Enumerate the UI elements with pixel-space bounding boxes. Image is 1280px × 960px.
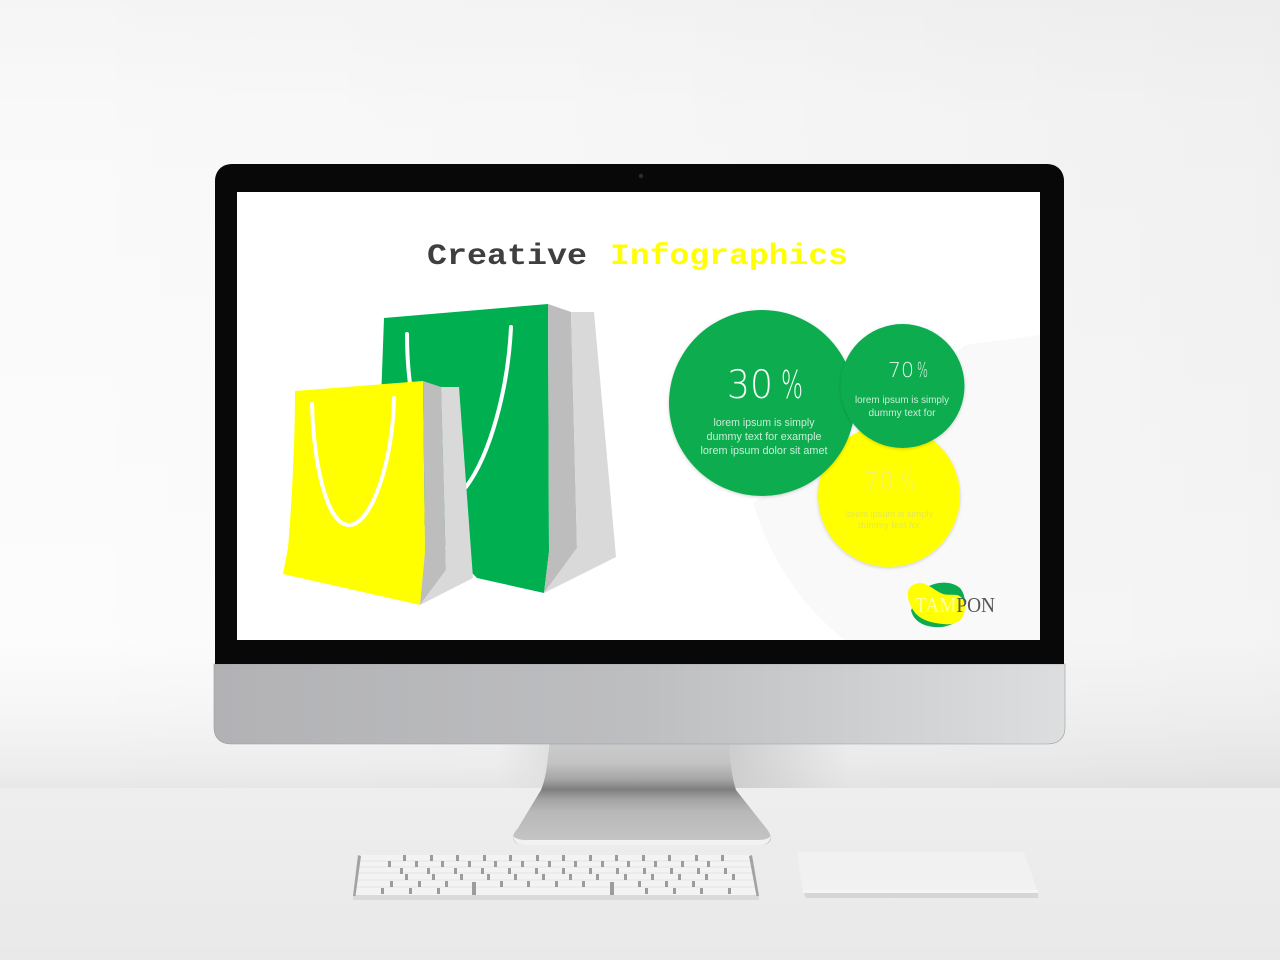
background: desk — [0, 788, 1280, 960]
monitor chin — [214, 664, 1065, 744]
circle: green 70%: 70 — [888, 358, 914, 382]
circle: yellow 70%: lorem ipsum is simply — [845, 509, 933, 520]
screen — [237, 192, 1040, 640]
circle: yellow 70%: dummy text for — [858, 520, 920, 531]
trackpad — [797, 852, 1038, 898]
circle: green 30%: % — [781, 363, 803, 407]
circle: green 70%: lorem ipsum is simply — [855, 395, 949, 406]
title: Creative — [427, 240, 587, 274]
circle: yellow 70%: % — [901, 467, 914, 496]
title — [427, 240, 848, 274]
logo — [908, 583, 995, 627]
stand shadow on wall — [498, 744, 849, 788]
circle: green 30%: lorem ipsum is simply — [714, 417, 815, 429]
circle: green 70% — [840, 324, 964, 448]
webcam — [639, 174, 643, 178]
circle: green 30%: dummy text for example — [706, 431, 822, 443]
circle: green 30%: 30 — [727, 363, 773, 408]
monitor bezel — [215, 164, 1064, 664]
circle: green 70%: dummy text for — [868, 408, 936, 419]
circle: green 30%: lorem ipsum dolor sit amet — [700, 445, 828, 457]
circle: yellow 70%: 70 — [864, 467, 894, 496]
title: Infographics — [610, 240, 848, 274]
background swoosh — [753, 335, 1040, 640]
circle: green 70%: % — [917, 358, 928, 382]
logo: TAMPON — [915, 593, 995, 617]
keyboard — [353, 855, 759, 900]
circle: yellow 70% — [818, 425, 960, 567]
icon: green shopping bag — [381, 304, 616, 593]
circle: green 30% — [669, 310, 855, 496]
monitor stand — [513, 742, 771, 845]
monitor — [214, 164, 1065, 845]
icon: yellow shopping bag — [283, 381, 473, 605]
